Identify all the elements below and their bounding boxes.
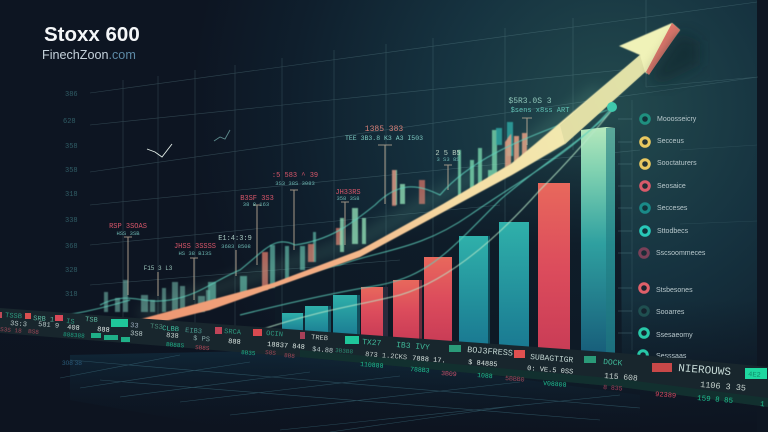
ticker text: 888 bbox=[228, 338, 241, 347]
y axis labels: 386 bbox=[65, 91, 78, 99]
ticker text: NIEROUWS bbox=[678, 363, 732, 379]
data labels: TEE 3B3.8 K3 A3 I503 bbox=[345, 135, 423, 142]
ticker text: 3B3B8 bbox=[335, 347, 354, 355]
legend item: Sttodbecs bbox=[657, 228, 689, 235]
title: Stoxx 600 bbox=[44, 23, 140, 46]
ticker text: 3S:3 bbox=[10, 320, 27, 329]
y axis labels: 368 bbox=[65, 243, 78, 251]
y axis labels: 338 bbox=[65, 217, 78, 225]
ticker text: 8 835 bbox=[603, 384, 623, 393]
ticker text: IS bbox=[66, 318, 75, 327]
legend item bbox=[641, 138, 684, 146]
chart grid bbox=[90, 0, 758, 350]
ticker text: BOJ3FRESS bbox=[467, 345, 513, 359]
legend item: Sooarres bbox=[656, 309, 685, 316]
subtitle: FinechZoon.com bbox=[42, 48, 136, 62]
node dot bbox=[607, 102, 617, 112]
trend lines bbox=[0, 108, 612, 330]
ticker text: 1088 bbox=[477, 372, 493, 380]
ticker chips bbox=[0, 312, 767, 379]
ticker text: 115 608 bbox=[604, 372, 638, 384]
legend item: Seosaice bbox=[657, 183, 686, 190]
ticker text: TREB bbox=[311, 334, 328, 343]
data labels: 3S3 38S 3083 bbox=[275, 180, 315, 187]
data labels: :5 583 ^ 39 bbox=[272, 171, 318, 180]
ticker text: IB3 IVY bbox=[396, 341, 430, 353]
ticker text bbox=[0, 312, 765, 409]
bar 7 bbox=[459, 236, 490, 344]
ticker text: 581 9 bbox=[38, 321, 59, 331]
ticker text: 0: VE.5 0SS bbox=[527, 365, 573, 377]
data labels: E1:4:3:9 bbox=[218, 235, 252, 243]
ticker text: 3B09 bbox=[441, 370, 457, 378]
data labels: HSS 3SB bbox=[116, 230, 140, 237]
data labels: 3683 8508 bbox=[221, 243, 251, 250]
ticker text: 838 bbox=[166, 332, 179, 341]
bar 3 bbox=[333, 295, 360, 337]
ticker text: V08808 bbox=[543, 380, 567, 389]
data labels: 2 5 B5 bbox=[435, 150, 461, 158]
arrow head side bbox=[646, 23, 680, 75]
ticker text: $4.88 bbox=[312, 346, 333, 356]
legend item: Mooosseicry bbox=[657, 116, 697, 123]
arrow shadow bbox=[650, 32, 700, 85]
ticker text: DOCK bbox=[603, 358, 623, 369]
rising arrow bbox=[130, 23, 700, 330]
ticker text: BS8 bbox=[28, 328, 40, 336]
ticker text: 18837 848 bbox=[267, 341, 305, 352]
ticker text: SRB 1 bbox=[33, 315, 54, 325]
ticker text: 5BBB0 bbox=[505, 375, 525, 384]
bar 8 bbox=[499, 222, 529, 347]
ticker text: 7888 17. bbox=[412, 355, 446, 366]
data labels: B3SF 3S3 bbox=[240, 195, 274, 203]
ticker text: 788B3 bbox=[410, 366, 430, 375]
legend item: Secceus bbox=[657, 138, 684, 145]
ticker text: S3S 18 bbox=[0, 326, 22, 335]
legend bbox=[618, 115, 706, 360]
floor axis label: 308 38 bbox=[62, 360, 82, 367]
ticker lower stripe bbox=[300, 350, 768, 407]
ticker text: 159 8 85 bbox=[697, 395, 734, 406]
ticker text: 873 1.2CKS bbox=[365, 351, 407, 362]
data labels: HS 38 BI3S bbox=[178, 250, 212, 257]
legend item bbox=[641, 115, 697, 123]
floor grid bbox=[60, 350, 640, 432]
city skyline bbox=[104, 122, 527, 312]
ticker text: 888388 bbox=[63, 331, 85, 340]
ticker text: 1106 3 35 bbox=[700, 380, 746, 394]
ticker text: $ 84885 bbox=[468, 359, 498, 369]
ticker text: SB8S bbox=[195, 344, 210, 352]
ticker text: 3S8 bbox=[130, 330, 143, 339]
ticker text: TSSB bbox=[5, 312, 22, 321]
ticker text: 8B35 bbox=[241, 349, 256, 357]
ticker text: 92389 bbox=[655, 391, 676, 401]
icon: sparkline bbox=[147, 144, 172, 157]
legend item: Stsbesones bbox=[656, 287, 693, 294]
ticker text: TS3 bbox=[150, 323, 163, 332]
data labels: JHSS 3SSSS bbox=[174, 243, 216, 251]
bar 5 bbox=[393, 280, 422, 340]
data labels: 38 8 163 bbox=[243, 201, 269, 208]
y axis labels: 358 bbox=[65, 167, 78, 175]
data labels: $sens x8ss ART bbox=[511, 107, 569, 115]
ticker text: $ PS bbox=[193, 335, 210, 344]
ticker text: 4E2 bbox=[748, 371, 761, 380]
y axis labels bbox=[63, 91, 78, 299]
arrow shaft shade bbox=[560, 55, 645, 144]
ticker text: 33 bbox=[130, 322, 139, 331]
y axis labels: 628 bbox=[63, 118, 76, 126]
legend item bbox=[639, 351, 687, 360]
bar 2 bbox=[305, 306, 331, 336]
bar chart bbox=[282, 127, 615, 360]
legend item bbox=[640, 249, 706, 257]
legend item: Sscsoommeces bbox=[656, 250, 706, 257]
ticker text: BB88S bbox=[166, 341, 185, 349]
ticker text: OCIN bbox=[266, 330, 283, 339]
ticker band bbox=[0, 308, 768, 409]
ticker text: 1 bbox=[760, 401, 765, 409]
data labels bbox=[109, 97, 569, 272]
legend item: Sooctaturers bbox=[657, 160, 697, 167]
label posts bbox=[124, 118, 532, 300]
bar 1 bbox=[282, 313, 305, 333]
icon: faint sparkline bbox=[214, 130, 230, 141]
legend item: Ssesaeomy bbox=[656, 332, 693, 339]
ticker text: 408 bbox=[67, 324, 80, 333]
legend item bbox=[641, 204, 688, 212]
data labels: 1385 383 bbox=[365, 125, 403, 134]
ticker text: SRCA bbox=[224, 328, 242, 337]
y axis labels: 318 bbox=[65, 291, 78, 299]
bar 9 bbox=[538, 183, 570, 353]
legend item bbox=[640, 329, 693, 339]
ticker text: SUBAGTIGR bbox=[530, 353, 574, 365]
bar 4 bbox=[361, 287, 388, 337]
bar 10 bbox=[581, 127, 615, 360]
ticker text: TSB bbox=[85, 316, 98, 325]
y axis labels: 318 bbox=[65, 191, 78, 199]
legend item bbox=[641, 160, 697, 168]
data labels: F15 3 L3 bbox=[144, 265, 173, 272]
legend item: Secceses bbox=[657, 205, 688, 212]
ticker text: 8B8 bbox=[284, 352, 296, 360]
data labels: 3 S3 8S bbox=[436, 156, 460, 163]
ticker text: TX27 bbox=[362, 338, 382, 349]
arrow glow bbox=[140, 90, 600, 315]
y axis labels: 328 bbox=[65, 267, 78, 275]
data labels: $5R3.0S 3 bbox=[508, 97, 552, 106]
legend item bbox=[641, 182, 686, 190]
y axis labels: 358 bbox=[65, 143, 78, 151]
data labels: JH33RS bbox=[335, 189, 361, 197]
legend item bbox=[640, 307, 685, 316]
legend item bbox=[641, 227, 689, 235]
legend item bbox=[640, 284, 693, 294]
ticker text: EIB3 bbox=[185, 327, 202, 336]
ticker text: S8S bbox=[265, 349, 277, 357]
legend item: Sesssaas bbox=[656, 353, 687, 360]
ticker text: 110888 bbox=[360, 361, 384, 370]
ticker text: 888 bbox=[97, 326, 110, 335]
bar 6 bbox=[424, 257, 452, 342]
data labels: 358 3S8 bbox=[336, 195, 360, 202]
ticker text: CLBB bbox=[162, 325, 179, 334]
data labels: RSP 3SOAS bbox=[109, 223, 147, 231]
